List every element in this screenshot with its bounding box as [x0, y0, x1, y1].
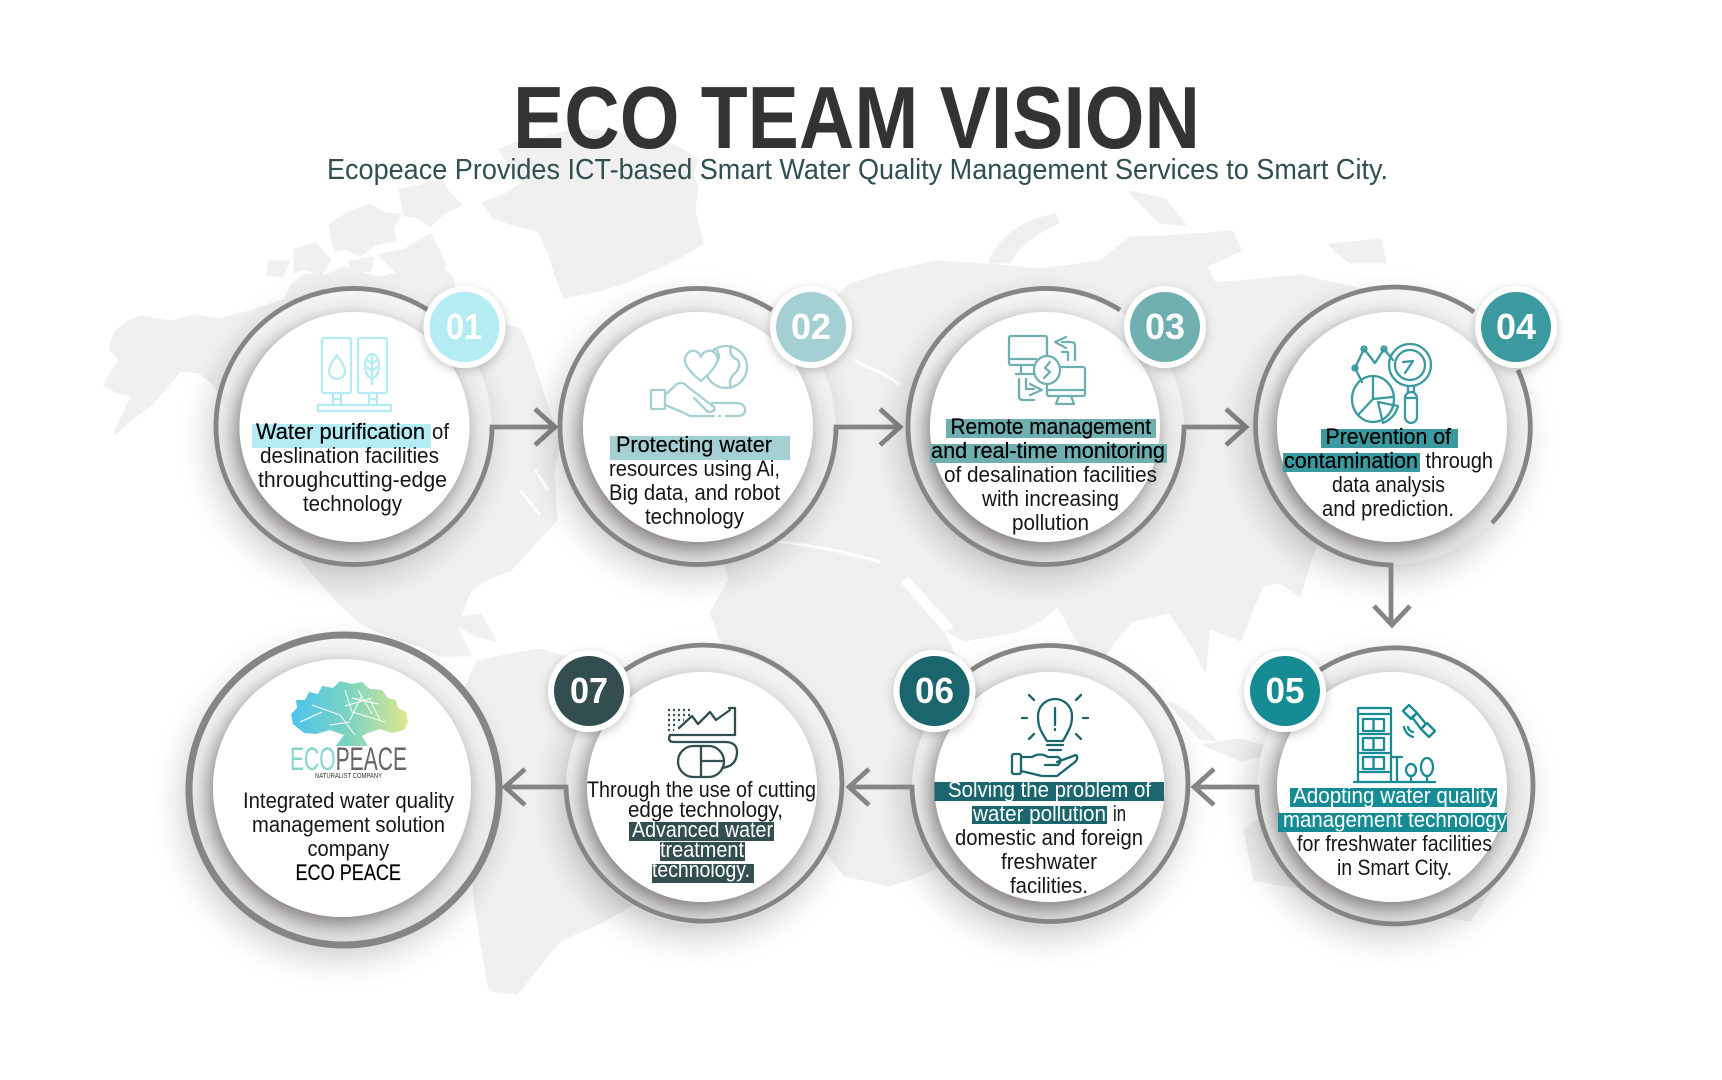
step 01 text: technology: [303, 491, 402, 516]
step 02 text: [609, 432, 790, 529]
icon: hand holding heart and globe: [651, 346, 747, 416]
background world map: [105, 130, 1540, 993]
badge 01: [424, 286, 506, 368]
ring and arrow to step 03: [560, 288, 900, 564]
step 07 text: Through the use of cutting: [587, 777, 816, 802]
icon: data analysis and magnifier: [1352, 344, 1431, 423]
step 05 text: [1278, 783, 1507, 880]
step 07 text: treatment: [660, 837, 744, 862]
badge 04: [1475, 286, 1557, 368]
step 02 text: technology: [645, 504, 744, 529]
step 06 text: freshwater: [1001, 849, 1097, 874]
badge 07: 07: [570, 670, 608, 711]
step 03 text: pollution: [1012, 510, 1089, 535]
logo: tagline: NATURALIST COMPANY: [315, 773, 382, 780]
ring and arrow to step 06: [1194, 648, 1533, 924]
step 07 text: edge technology,: [628, 797, 783, 822]
badge 06: [894, 650, 976, 732]
step 06 text: [934, 777, 1164, 898]
icon: monitors exchanging data: [1009, 336, 1085, 404]
step 06 text: domestic and foreign: [955, 825, 1143, 850]
outer ring: [189, 635, 499, 945]
step 05 text: for freshwater facilities: [1297, 831, 1492, 856]
step 02 text: Big data, and robot: [609, 480, 780, 505]
step 04 text: contamination: [1284, 448, 1418, 473]
step 07 text: Advanced water: [632, 817, 773, 842]
step 01 panel: [210, 286, 555, 577]
step 01 text: Water purification: [256, 419, 425, 444]
step 07 panel: [505, 645, 842, 937]
step 02 panel: [554, 286, 900, 577]
icon: light bulb over hand: [1012, 695, 1088, 776]
ring and arrow to step 05: [1256, 287, 1530, 625]
step 04 text: Prevention of: [1326, 424, 1452, 449]
step 07 text: [587, 777, 816, 883]
step 06 text: water pollution: [972, 801, 1106, 826]
step 03 text: of desalination facilities: [944, 462, 1157, 487]
step 04 panel: [1248, 286, 1557, 625]
badge 05: [1244, 650, 1326, 732]
step 02 text: resources using Ai,: [609, 456, 780, 481]
step 06 panel: [849, 646, 1188, 937]
icon: chart and pill: [668, 708, 737, 777]
step 01 text: [252, 419, 450, 516]
step 04 text: through: [1426, 448, 1493, 473]
step 01 text: throughcutting-edge: [258, 467, 447, 492]
step 05 text: Adopting water quality: [1293, 783, 1496, 808]
logo: tree: [291, 681, 408, 746]
badge 05: 05: [1266, 670, 1304, 711]
step 01 text: of: [432, 419, 450, 444]
badge 04: 04: [1496, 306, 1536, 347]
ring and arrow to step 07: [849, 646, 1188, 922]
company description: [243, 788, 454, 885]
company description: ECO PEACE: [296, 860, 401, 885]
step 02 text: Protecting water: [616, 432, 772, 457]
badge 03: [1124, 286, 1206, 368]
step 03 text: Remote management: [950, 414, 1151, 439]
badge 03: 03: [1145, 306, 1185, 347]
step 03 text: and real-time monitoring: [931, 438, 1165, 463]
badge 06: 06: [915, 670, 954, 711]
step 04 text: data analysis: [1332, 472, 1445, 497]
step 07 text: technology.: [652, 857, 750, 882]
badge 02: 02: [791, 306, 831, 347]
step 03 text: with increasing: [981, 486, 1119, 511]
step 05 panel: [1194, 648, 1533, 937]
step 04 text: [1283, 424, 1493, 521]
company description: Integrated water quality: [243, 788, 454, 813]
icon: water and plant tanks: [318, 338, 391, 411]
badge 02: [770, 286, 852, 368]
step 05 text: in Smart City.: [1337, 855, 1452, 880]
step 06 text: Solving the problem of: [948, 777, 1152, 802]
title: ECO TEAM VISION: [513, 68, 1200, 167]
step 05 text: management technology: [1283, 807, 1507, 832]
badge 07: [548, 650, 630, 732]
step 04 text: and prediction.: [1322, 496, 1454, 521]
company description: company: [308, 836, 389, 861]
company panel: ECO PEACE: [183, 635, 499, 958]
logo: wordmark: ECOPEACE: [290, 741, 407, 777]
badge 01: 01: [446, 306, 482, 347]
step 06 text: facilities.: [1010, 873, 1088, 898]
ring and arrow to step 04: [908, 288, 1246, 564]
ring and arrow to step 02: [216, 288, 555, 564]
company description: management solution: [252, 812, 445, 837]
step 03 text: [930, 414, 1167, 535]
icon: building, satellite and trees: [1354, 705, 1435, 782]
step 06 text: in: [1113, 801, 1126, 826]
step 01 text: deslination facilities: [260, 443, 439, 468]
step 03 panel: [902, 286, 1246, 577]
subtitle: Ecopeace Provides ICT-based Smart Water Quality Management Services to Smart City.: [327, 154, 1388, 186]
ring and arrow to logo: [505, 645, 842, 921]
